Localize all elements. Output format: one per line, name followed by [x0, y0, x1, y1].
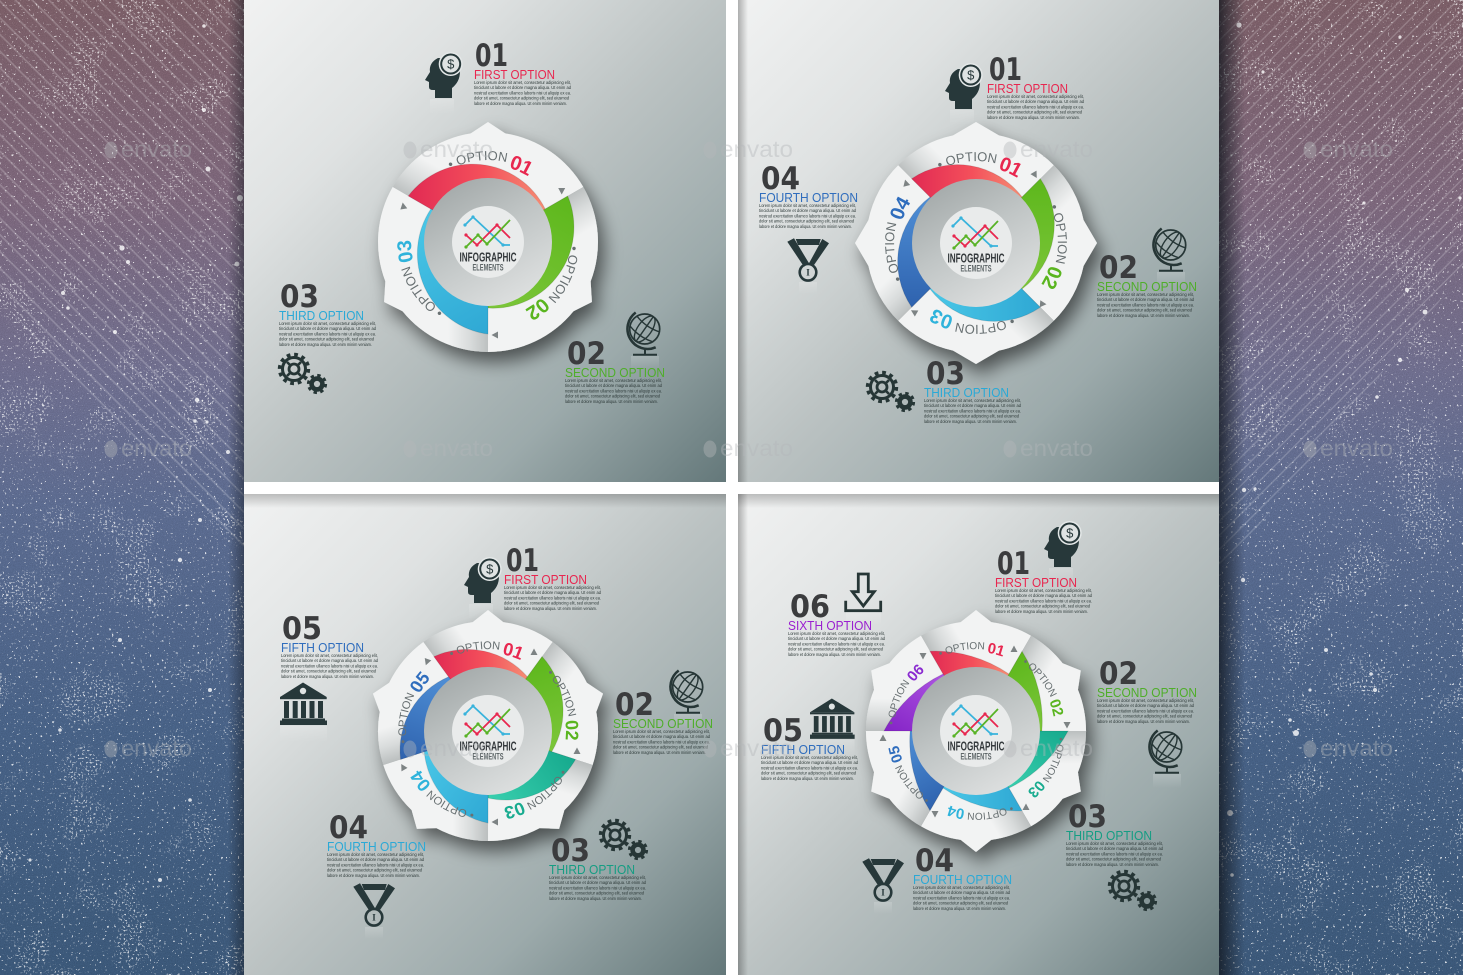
block: option 01: labore et dolore magna aliqua. Ut enim minim veniam. [504, 606, 597, 611]
block: option 03: 03 [926, 356, 965, 392]
block: option 02: labore et dolore magna aliqua. Ut enim minim veniam. [1097, 719, 1190, 724]
wheel: five segments: 05 [410, 671, 429, 692]
block: option 01: labore et dolore magna aliqua. Ut enim minim veniam. [987, 115, 1080, 120]
block: option 03: dolor sit amet, consectetur adipiscing elit, sed eiusmod [279, 337, 374, 342]
icon: medal [353, 883, 395, 939]
icon: gears [868, 373, 914, 411]
block: option 02: nostrud exercitation ullamco laboris nisi ut aliquip ex ea. [565, 388, 662, 393]
block: option 01: Lorem ipsum dolor sit amet, consectetur adipiscing elit, [474, 80, 571, 85]
block: option 03 [279, 279, 376, 347]
icon: head with coin [425, 52, 463, 114]
block: option 04: 04 [915, 843, 954, 879]
block: option 01: tincidunt ut labore et dolore magna aliqua. Ut enim ad [995, 593, 1092, 598]
wheel: five segments: • OPTION [426, 790, 474, 817]
block: option 06: tincidunt ut labore et dolore magna aliqua. Ut enim ad [788, 636, 885, 641]
wheel: three segments: • OPTION [448, 151, 508, 166]
block: option 05: tincidunt ut labore et dolore magna aliqua. Ut enim ad [281, 658, 378, 663]
block: option 04: dolor sit amet, consectetur adipiscing elit, sed eiusmod [759, 219, 854, 224]
block: option 01: Lorem ipsum dolor sit amet, consectetur adipiscing elit, [987, 94, 1084, 99]
icon: head with coin [1044, 521, 1082, 583]
block: option 05: labore et dolore magna aliqua. Ut enim minim veniam. [281, 674, 374, 679]
block: option 06: nostrud exercitation ullamco laboris nisi ut aliquip ex ea. [788, 641, 885, 646]
wheel: four segments: • OPTION [938, 152, 997, 166]
block: option 03: tincidunt ut labore et dolore magna aliqua. Ut enim ad [1066, 846, 1163, 851]
block: option 03: Lorem ipsum dolor sit amet, consectetur adipiscing elit, [549, 875, 646, 880]
block: option 04: nostrud exercitation ullamco laboris nisi ut aliquip ex ea. [759, 213, 856, 218]
block: option 01 [474, 38, 571, 106]
block: option 04 [327, 810, 426, 878]
icon: medal [862, 858, 904, 914]
block: option 04: tincidunt ut labore et dolore magna aliqua. Ut enim ad [913, 890, 1010, 895]
block: option 01: labore et dolore magna aliqua. Ut enim minim veniam. [995, 609, 1088, 614]
block: option 01: labore et dolore magna aliqua. Ut enim minim veniam. [474, 101, 567, 106]
panel: three options [244, 0, 726, 482]
watermarks: envato [1320, 136, 1393, 162]
block: option 01 [987, 52, 1084, 120]
wheel: six segments: • OPTION [1042, 738, 1064, 782]
block: option 05: 05 [763, 713, 803, 749]
block: option 02: tincidunt ut labore et dolore magna aliqua. Ut enim ad [565, 383, 662, 388]
block: option 03: nostrud exercitation ullamco laboris nisi ut aliquip ex ea. [549, 885, 646, 890]
block: option 01: Lorem ipsum dolor sit amet, consectetur adipiscing elit, [504, 585, 601, 590]
block: option 02: tincidunt ut labore et dolore magna aliqua. Ut enim ad [613, 734, 710, 739]
block: option 02: 02 [1099, 250, 1138, 286]
block: option 04: Lorem ipsum dolor sit amet, consectetur adipiscing elit, [327, 852, 424, 857]
watermarks: envato [121, 735, 192, 761]
wheel: six segments: 06 [908, 664, 924, 680]
block: option 03: 03 [280, 279, 319, 315]
icon: medal [787, 238, 829, 294]
block: option 02: dolor sit amet, consectetur adipiscing elit, sed eiusmod [1097, 308, 1192, 313]
block: option 02: 02 [615, 687, 654, 723]
block: option 05: dolor sit amet, consectetur adipiscing elit, sed eiusmod [761, 771, 856, 776]
block: option 01: 01 [506, 543, 539, 579]
block: option 02: nostrud exercitation ullamco laboris nisi ut aliquip ex ea. [1097, 708, 1194, 713]
block: option 04: tincidunt ut labore et dolore magna aliqua. Ut enim ad [759, 208, 856, 213]
block: option 02: SECOND OPTION [1097, 685, 1197, 700]
block: option 02: SECOND OPTION [613, 716, 713, 731]
block: option 05: Lorem ipsum dolor sit amet, consectetur adipiscing elit, [761, 755, 858, 760]
block: option 03: nostrud exercitation ullamco laboris nisi ut aliquip ex ea. [279, 331, 376, 336]
wheel: three segments: • OPTION [548, 246, 578, 304]
block: option 02: dolor sit amet, consectetur adipiscing elit, sed eiusmod [565, 394, 660, 399]
block: option 05: tincidunt ut labore et dolore magna aliqua. Ut enim ad [761, 760, 858, 765]
wheel: five segments: • OPTION [450, 641, 500, 655]
icon: head with coin: $ [486, 562, 494, 577]
block: option 03: labore et dolore magna aliqua. Ut enim minim veniam. [1066, 862, 1159, 867]
block: option 01: dolor sit amet, consectetur adipiscing elit, sed eiusmod [987, 110, 1082, 115]
wheel: four segments: 02 [1042, 267, 1062, 289]
wheel: four segments: INFOGRAPHIC [947, 250, 1005, 266]
block: option 03 [549, 833, 646, 901]
block: option 03: 03 [1068, 799, 1107, 835]
wheel: four segments: ELEMENTS [960, 264, 992, 274]
block: option 03: tincidunt ut labore et dolore magna aliqua. Ut enim ad [279, 326, 376, 331]
block: option 01: Lorem ipsum dolor sit amet, consectetur adipiscing elit, [995, 588, 1092, 593]
wheel: five segments: 04 [410, 770, 430, 791]
block: option 01: nostrud exercitation ullamco laboris nisi ut aliquip ex ea. [987, 104, 1084, 109]
block: option 05 [761, 713, 858, 781]
block: option 02: SECOND OPTION [565, 365, 665, 380]
wheel: six segments: • OPTION [968, 807, 1013, 820]
block: option 02: tincidunt ut labore et dolore magna aliqua. Ut enim ad [1097, 703, 1194, 708]
block: option 03: labore et dolore magna aliqua. Ut enim minim veniam. [279, 342, 372, 347]
block: option 01: dolor sit amet, consectetur adipiscing elit, sed eiusmod [995, 604, 1090, 609]
block: option 03: labore et dolore magna aliqua. Ut enim minim veniam. [924, 419, 1017, 424]
block: option 03: nostrud exercitation ullamco laboris nisi ut aliquip ex ea. [924, 408, 1021, 413]
wheel: four segments: • OPTION [955, 320, 1014, 334]
white frame [244, 0, 1219, 975]
wheel: three segments: • OPTION [401, 266, 442, 315]
icon: medal: I [881, 888, 885, 898]
block: option 05: Lorem ipsum dolor sit amet, consectetur adipiscing elit, [281, 653, 378, 658]
block: option 02: labore et dolore magna aliqua. Ut enim minim veniam. [565, 399, 658, 404]
wheel: five segments: 01 [504, 643, 522, 660]
wheel: three segments: 02 [526, 299, 549, 320]
wheel: three segments: INFOGRAPHIC [459, 250, 517, 264]
block: option 02: Lorem ipsum dolor sit amet, consectetur adipiscing elit, [1097, 698, 1194, 703]
block: option 01: nostrud exercitation ullamco laboris nisi ut aliquip ex ea. [474, 90, 571, 95]
block: option 04: FOURTH OPTION [913, 872, 1012, 887]
icon: download arrow [846, 574, 881, 625]
wheel: six segments: • OPTION [939, 642, 984, 655]
block: option 03: Lorem ipsum dolor sit amet, consectetur adipiscing elit, [279, 321, 376, 326]
wheel: three segments [372, 122, 616, 374]
block: option 02: Lorem ipsum dolor sit amet, consectetur adipiscing elit, [1097, 292, 1194, 297]
wheel: three segments: ELEMENTS [472, 262, 504, 274]
block: option 03: tincidunt ut labore et dolore magna aliqua. Ut enim ad [549, 880, 646, 885]
block: option 01: tincidunt ut labore et dolore magna aliqua. Ut enim ad [474, 85, 571, 90]
wheel: six segments: • OPTION [1024, 660, 1057, 697]
block: option 01 [995, 546, 1092, 614]
block: option 03: Lorem ipsum dolor sit amet, consectetur adipiscing elit, [924, 398, 1021, 403]
block: option 03: THIRD OPTION [549, 862, 635, 877]
block: option 05: FIFTH OPTION [761, 742, 845, 757]
watermarks: envato [1020, 735, 1093, 761]
block: option 02 [613, 687, 713, 755]
block: option 02: nostrud exercitation ullamco laboris nisi ut aliquip ex ea. [1097, 302, 1194, 307]
block: option 04: FOURTH OPTION [759, 190, 858, 205]
wheel: six segments: INFOGRAPHIC [947, 738, 1005, 754]
block: option 05: nostrud exercitation ullamco laboris nisi ut aliquip ex ea. [761, 765, 858, 770]
block: option 05: FIFTH OPTION [281, 640, 364, 655]
block: option 04: Lorem ipsum dolor sit amet, consectetur adipiscing elit, [913, 885, 1010, 890]
block: option 04: dolor sit amet, consectetur adipiscing elit, sed eiusmod [913, 901, 1008, 906]
block: option 02: SECOND OPTION [1097, 279, 1197, 294]
block: option 04: 04 [761, 161, 800, 197]
icon: medal: I [372, 912, 376, 922]
block: option 06: 06 [790, 589, 830, 625]
block: option 01 [504, 543, 601, 611]
wheel: five segments: • OPTION [527, 770, 564, 810]
block: option 06: dolor sit amet, consectetur adipiscing elit, sed eiusmod [788, 647, 883, 652]
icon: head with coin: $ [1066, 526, 1074, 541]
wheel: five segments: • OPTION [549, 670, 576, 716]
block: option 06 [788, 589, 885, 657]
block: option 02 [1097, 656, 1197, 724]
block: option 06: SIXTH OPTION [788, 618, 872, 633]
wheel: four segments: 04 [890, 196, 910, 219]
block: option 05: labore et dolore magna aliqua. Ut enim minim veniam. [761, 776, 854, 781]
block: option 02: 02 [1099, 656, 1138, 692]
block: option 04: dolor sit amet, consectetur adipiscing elit, sed eiusmod [327, 868, 422, 873]
block: option 02 [565, 336, 665, 404]
block: option 04: labore et dolore magna aliqua. Ut enim minim veniam. [327, 873, 420, 878]
block: option 03: dolor sit amet, consectetur adipiscing elit, sed eiusmod [549, 891, 644, 896]
watermarks [104, 136, 1393, 761]
wheel: five segments [370, 610, 618, 862]
wheel: five segments: • OPTION [398, 692, 414, 744]
block: option 01: tincidunt ut labore et dolore magna aliqua. Ut enim ad [504, 590, 601, 595]
icon: bank [810, 698, 855, 755]
panel: four options [738, 0, 1219, 482]
watermarks: envato [1320, 735, 1393, 761]
wheel: six segments: • OPTION [895, 765, 928, 802]
block: option 02: nostrud exercitation ullamco laboris nisi ut aliquip ex ea. [613, 739, 710, 744]
block: option 03: 03 [551, 833, 590, 869]
icon: globe [1147, 727, 1186, 788]
wheel: six segments: 03 [1028, 782, 1044, 798]
block: option 02 [1097, 250, 1197, 318]
block: option 06: Lorem ipsum dolor sit amet, consectetur adipiscing elit, [788, 631, 885, 636]
block: option 06: labore et dolore magna aliqua. Ut enim minim veniam. [788, 652, 881, 657]
block: option 05: nostrud exercitation ullamco laboris nisi ut aliquip ex ea. [281, 663, 378, 668]
block: option 03: dolor sit amet, consectetur adipiscing elit, sed eiusmod [1066, 857, 1161, 862]
block: option 01: nostrud exercitation ullamco laboris nisi ut aliquip ex ea. [995, 598, 1092, 603]
wheel: three segments: 03 [397, 240, 412, 262]
block: option 04: 04 [329, 810, 368, 846]
block: option 02: dolor sit amet, consectetur adipiscing elit, sed eiusmod [613, 745, 708, 750]
block: option 01: 01 [989, 52, 1022, 88]
wheel: six segments: 02 [1050, 700, 1064, 716]
icon: head with coin: $ [447, 57, 455, 72]
block: option 04: nostrud exercitation ullamco laboris nisi ut aliquip ex ea. [327, 862, 424, 867]
panel: six options [738, 494, 1219, 975]
block: option 03: nostrud exercitation ullamco laboris nisi ut aliquip ex ea. [1066, 851, 1163, 856]
icon: gears [1110, 872, 1156, 910]
block: option 01: FIRST OPTION [987, 81, 1068, 96]
block: option 04 [913, 843, 1012, 911]
wheel: five segments: 02 [566, 720, 578, 740]
block: option 03 [924, 356, 1021, 424]
block: option 04: FOURTH OPTION [327, 839, 426, 854]
wheel: four segments: • OPTION [885, 222, 900, 281]
block: option 02: tincidunt ut labore et dolore magna aliqua. Ut enim ad [1097, 297, 1194, 302]
block: option 01: FIRST OPTION [504, 572, 587, 587]
icon: head with coin: $ [967, 68, 975, 83]
watermarks: envato [1320, 435, 1393, 461]
block: option 02: labore et dolore magna aliqua. Ut enim minim veniam. [613, 750, 706, 755]
wheel: six segments [860, 610, 1104, 870]
wheel: four segments: 03 [930, 310, 952, 328]
block: option 05: dolor sit amet, consectetur adipiscing elit, sed eiusmod [281, 669, 376, 674]
icon: globe [1151, 225, 1190, 286]
wheel: four segments: • OPTION [1052, 205, 1067, 264]
icon: head with coin [464, 557, 502, 619]
watermarks: envato [720, 136, 793, 162]
block: option 01: dolor sit amet, consectetur adipiscing elit, sed eiusmod [474, 96, 569, 101]
wheel: four segments: 01 [1000, 158, 1021, 178]
block: option 01: FIRST OPTION [995, 575, 1077, 590]
watermarks: envato [1020, 136, 1093, 162]
block: option 04: nostrud exercitation ullamco laboris nisi ut aliquip ex ea. [913, 895, 1010, 900]
watermarks: envato [420, 735, 493, 761]
watermarks: envato [121, 136, 192, 162]
block: option 03: THIRD OPTION [1066, 828, 1152, 843]
block: option 05: 05 [282, 611, 322, 647]
block: option 02: Lorem ipsum dolor sit amet, consectetur adipiscing elit, [565, 378, 662, 383]
panel: five options [244, 494, 726, 975]
block: option 01: 01 [997, 546, 1030, 582]
wheel: four segments [852, 122, 1112, 382]
block: option 03: THIRD OPTION [279, 308, 364, 323]
block: option 01: dolor sit amet, consectetur adipiscing elit, sed eiusmod [504, 601, 599, 606]
block: option 01: tincidunt ut labore et dolore magna aliqua. Ut enim ad [987, 99, 1084, 104]
icon: head with coin [945, 63, 983, 125]
block: option 03: labore et dolore magna aliqua. Ut enim minim veniam. [549, 896, 642, 901]
icon: globe [625, 309, 664, 370]
block: option 05 [281, 611, 378, 679]
wheel: six segments: • OPTION [888, 680, 910, 724]
wheel: six segments: 05 [888, 746, 902, 762]
block: option 01: FIRST OPTION [474, 67, 555, 82]
block: option 02: labore et dolore magna aliqua. Ut enim minim veniam. [1097, 313, 1190, 318]
block: option 03: THIRD OPTION [924, 385, 1009, 400]
icon: gears [280, 355, 326, 393]
icon: globe [668, 667, 707, 728]
watermarks: envato [1020, 435, 1093, 461]
block: option 01: 01 [475, 38, 508, 74]
block: option 04: labore et dolore magna aliqua. Ut enim minim veniam. [759, 224, 852, 229]
wheel: six segments: 01 [988, 643, 1004, 656]
block: option 03: dolor sit amet, consectetur adipiscing elit, sed eiusmod [924, 414, 1019, 419]
wheel: six segments: 04 [948, 806, 964, 819]
icon: medal: I [806, 268, 810, 278]
block: option 01: nostrud exercitation ullamco laboris nisi ut aliquip ex ea. [504, 595, 601, 600]
block: option 04: tincidunt ut labore et dolore magna aliqua. Ut enim ad [327, 857, 424, 862]
wheel: five segments: ELEMENTS [472, 752, 504, 762]
icon: gears [601, 821, 647, 859]
watermarks: envato [121, 435, 192, 461]
block: option 04: labore et dolore magna aliqua. Ut enim minim veniam. [913, 906, 1006, 911]
block: option 03 [1066, 799, 1163, 867]
block: option 03: tincidunt ut labore et dolore magna aliqua. Ut enim ad [924, 403, 1021, 408]
block: option 04: Lorem ipsum dolor sit amet, consectetur adipiscing elit, [759, 203, 856, 208]
watermarks: envato [420, 136, 493, 162]
wheel: five segments: INFOGRAPHIC [459, 738, 517, 754]
block: option 03: Lorem ipsum dolor sit amet, consectetur adipiscing elit, [1066, 841, 1163, 846]
watermarks: envato [420, 435, 493, 461]
wheel: five segments: 03 [504, 802, 524, 819]
block: option 04 [759, 161, 858, 229]
wheel: three segments: 01 [510, 156, 532, 176]
block: option 02: dolor sit amet, consectetur adipiscing elit, sed eiusmod [1097, 714, 1192, 719]
icon: bank [280, 682, 327, 742]
wheel: six segments: ELEMENTS [960, 752, 992, 762]
block: option 02: 02 [567, 336, 606, 372]
block: option 02: Lorem ipsum dolor sit amet, consectetur adipiscing elit, [613, 729, 710, 734]
watermarks: envato [720, 735, 793, 761]
watermarks: envato [720, 435, 793, 461]
